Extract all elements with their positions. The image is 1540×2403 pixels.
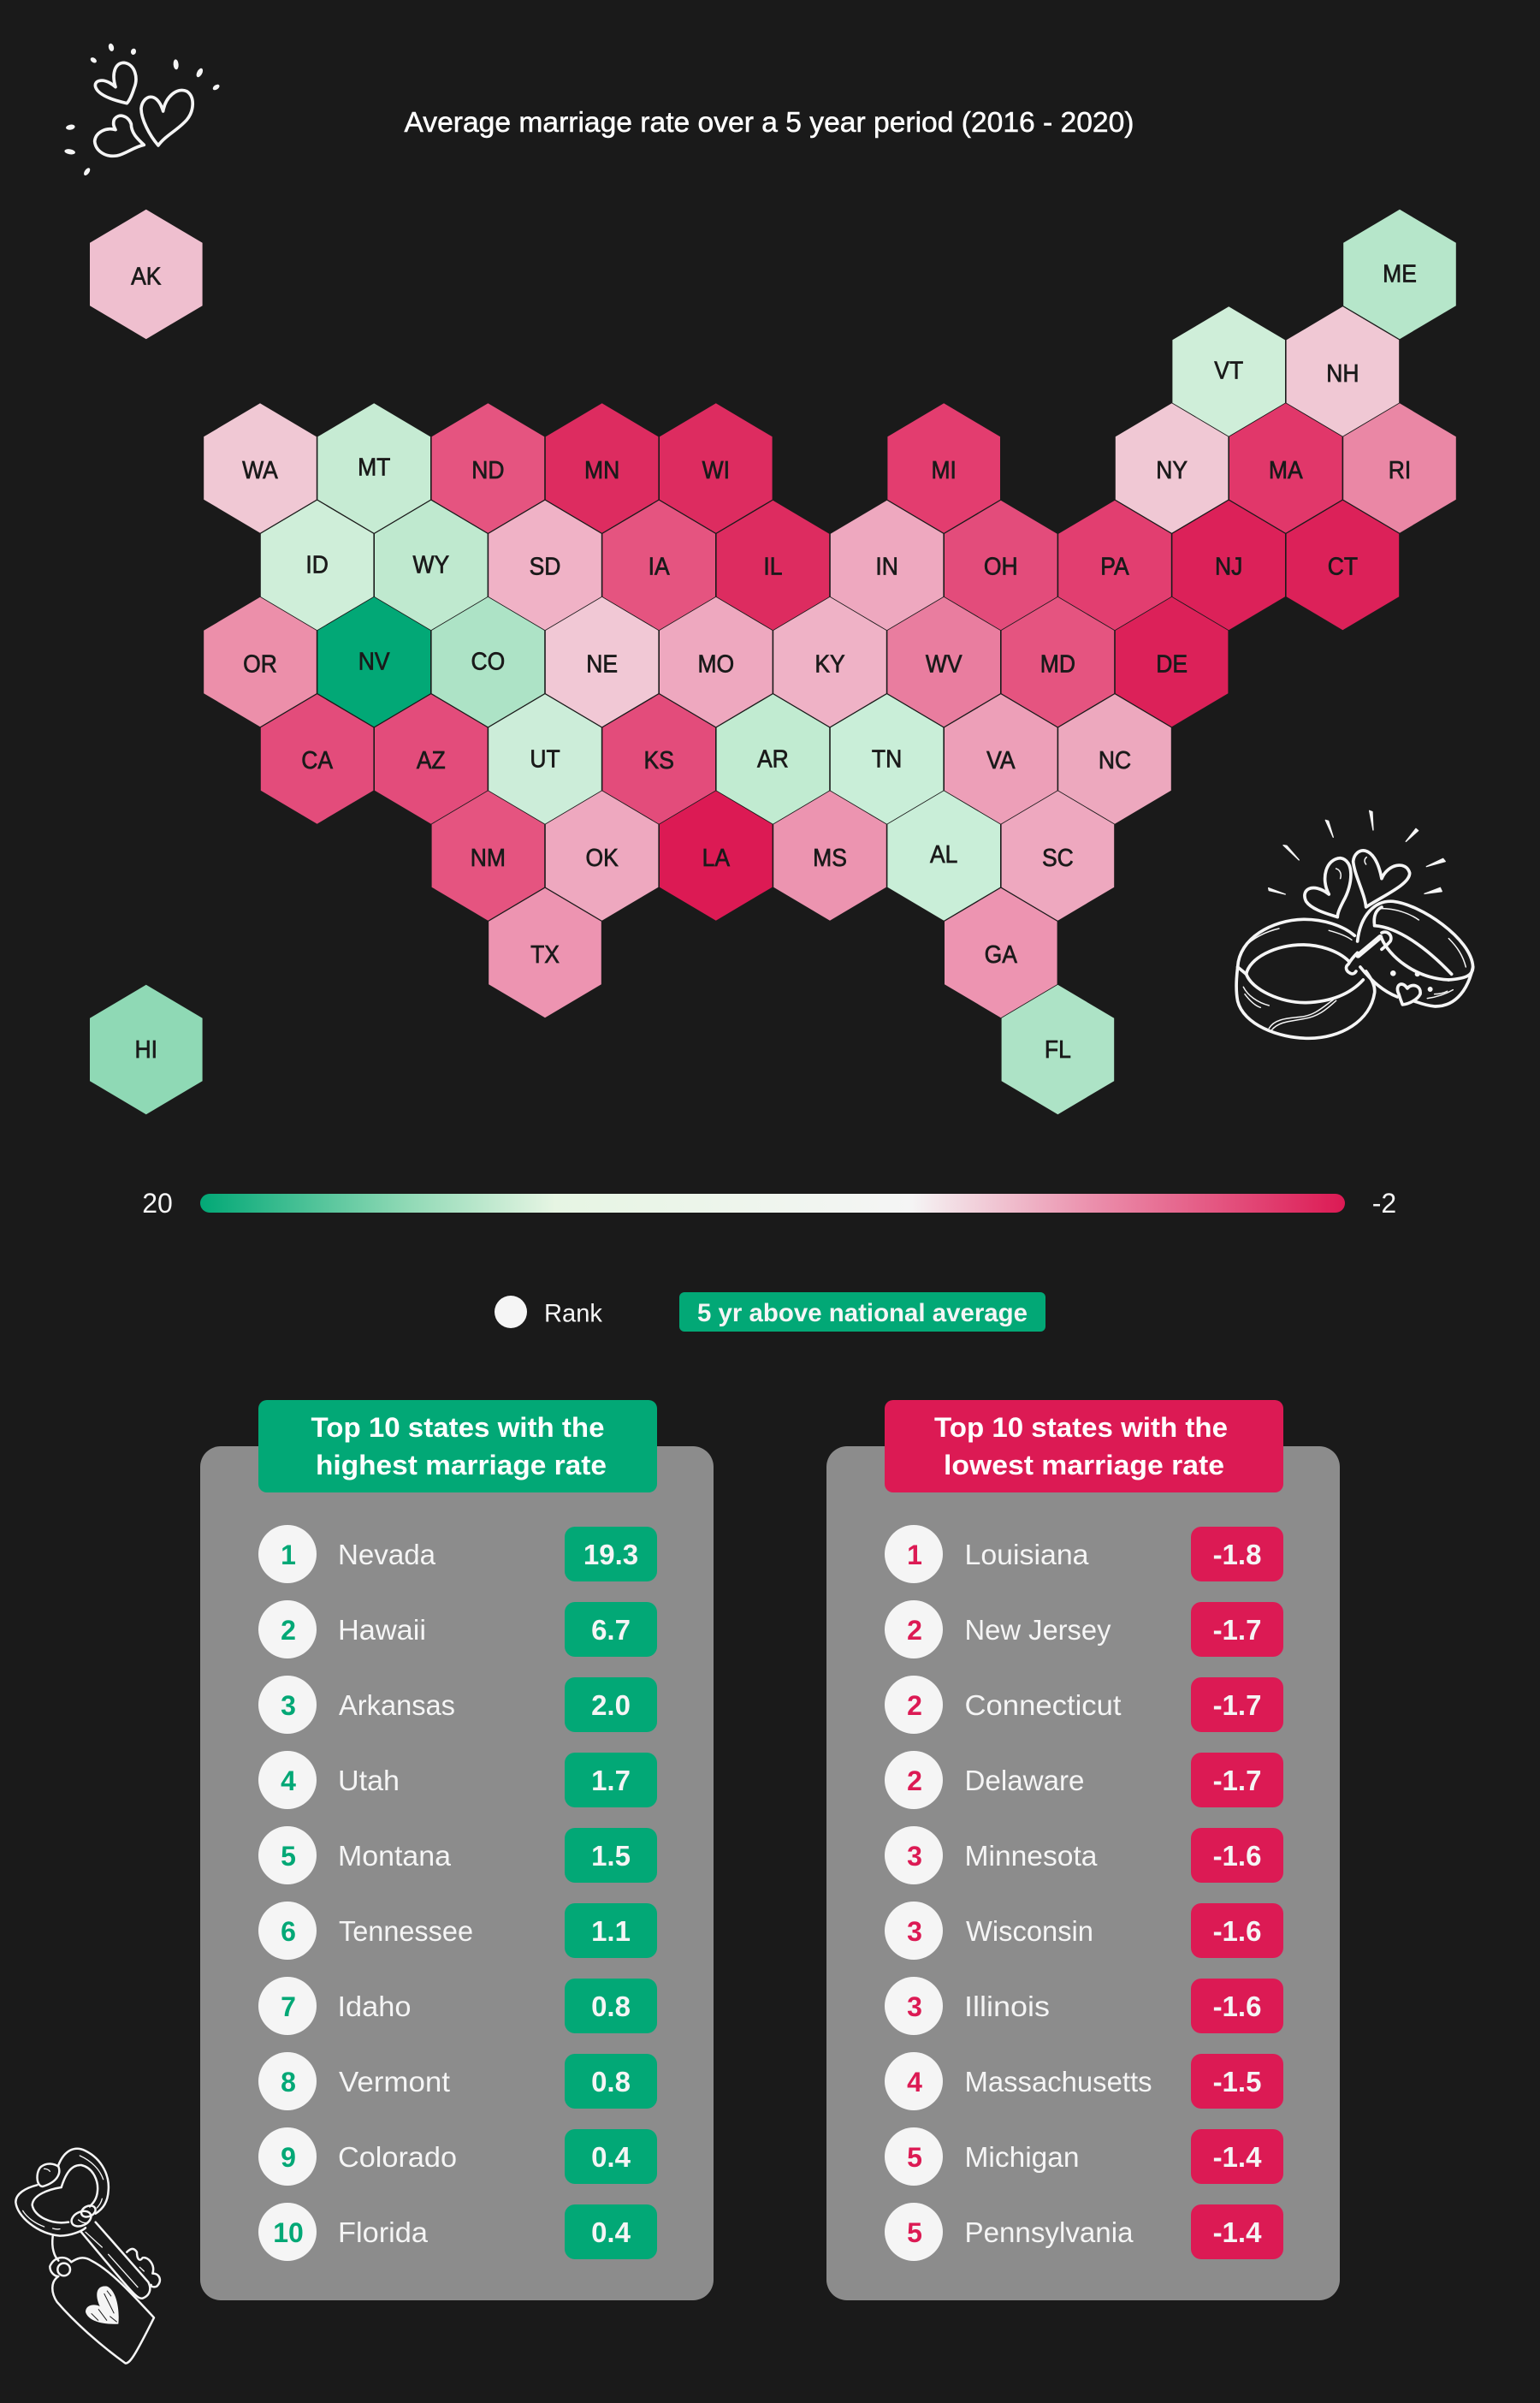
state: SC: SC	[1042, 844, 1074, 871]
row: Vermont: 8	[281, 2067, 296, 2097]
state: MS: MS	[813, 844, 847, 871]
panel heading	[885, 1400, 1283, 1492]
state: DE: DE	[1156, 650, 1188, 678]
state: PA	[1058, 501, 1171, 630]
row: Illinois: -1.6	[1213, 1991, 1261, 2022]
state: PA: PA	[1100, 553, 1129, 580]
state: OK: OK	[585, 844, 619, 871]
row: Vermont: Vermont	[339, 2066, 450, 2097]
state: AK	[90, 210, 203, 339]
row: Arkansas: 2.0	[591, 1689, 631, 1721]
row: Pennsylvania: -1.4	[1213, 2216, 1262, 2248]
panel heading: Top 10 states with the	[311, 1412, 604, 1443]
row: Wisconsin	[885, 1902, 1283, 1960]
row: Minnesota: 3	[907, 1841, 922, 1872]
state: IA	[602, 501, 715, 630]
state: MI: MI	[931, 456, 957, 484]
row: Michigan: Michigan	[965, 2141, 1080, 2173]
row: Pennsylvania: 5	[907, 2217, 922, 2248]
row: Utah: 4	[281, 1765, 296, 1796]
row: Hawaii	[258, 1600, 657, 1658]
row: Connecticut: 2	[907, 1690, 922, 1721]
state: MN	[546, 403, 658, 533]
row: Nevada	[258, 1525, 657, 1583]
state: ID: ID	[305, 551, 329, 578]
state: GA	[945, 888, 1057, 1018]
state: WI	[660, 403, 773, 533]
state: NY	[1116, 403, 1228, 533]
state: MO: MO	[697, 650, 734, 678]
state: MN: MN	[584, 456, 619, 484]
icon: key with heart tag	[15, 2149, 160, 2364]
state: TX: TX	[530, 940, 560, 968]
state: OH: OH	[984, 553, 1018, 580]
state: NC: NC	[1099, 746, 1131, 774]
state: CA	[261, 694, 373, 824]
state: UT	[489, 694, 601, 824]
row: Massachusetts	[885, 2052, 1283, 2110]
row: Vermont: 0.8	[591, 2066, 631, 2097]
row: Colorado	[258, 2127, 657, 2186]
row: Utah: Utah	[338, 1765, 400, 1796]
row: Colorado: Colorado	[338, 2141, 457, 2173]
state: FL: FL	[1045, 1035, 1071, 1063]
state: MO	[660, 597, 773, 727]
row: Louisiana: 1	[907, 1540, 922, 1570]
row: Montana: Montana	[338, 1840, 452, 1872]
row: Nevada: 1	[281, 1540, 296, 1570]
row: Tennessee: Tennessee	[339, 1915, 473, 1947]
state: MA: MA	[1269, 456, 1303, 484]
row: Idaho: 0.8	[591, 1991, 631, 2022]
state: VA	[945, 694, 1057, 824]
key: rank	[495, 1296, 603, 1328]
row: Illinois: 3	[907, 1991, 922, 2022]
row: New Jersey: 2	[907, 1615, 922, 1646]
state: KY: KY	[814, 650, 845, 678]
row: Montana: 1.5	[591, 1840, 631, 1872]
row: Idaho	[258, 1977, 657, 2035]
state: NJ	[1172, 501, 1285, 630]
state: CO	[432, 597, 544, 727]
state: LA	[660, 791, 773, 921]
state: WV	[887, 597, 1000, 727]
state: NY: NY	[1156, 456, 1188, 484]
state: KS	[602, 694, 715, 824]
row: Colorado: 0.4	[591, 2141, 631, 2173]
row: Louisiana	[885, 1525, 1283, 1583]
state: HI	[90, 985, 203, 1114]
panel heading	[258, 1400, 657, 1492]
row: Connecticut: -1.7	[1213, 1689, 1261, 1721]
row: New Jersey: -1.7	[1213, 1614, 1261, 1646]
state: IN: IN	[875, 553, 898, 580]
row: Louisiana: -1.8	[1213, 1539, 1261, 1570]
state: HI: HI	[135, 1035, 157, 1063]
row: Nevada: Nevada	[338, 1539, 436, 1570]
state: AL	[887, 791, 1000, 921]
state: NE	[546, 597, 658, 727]
state: MT	[317, 403, 430, 533]
row: Utah: 1.7	[591, 1765, 631, 1796]
row: Colorado: 9	[281, 2142, 296, 2173]
state: ND	[432, 403, 544, 533]
state: NV: NV	[358, 648, 390, 675]
row: Michigan: -1.4	[1213, 2141, 1262, 2173]
row: Tennessee: 1.1	[591, 1915, 631, 1947]
state: CT	[1287, 501, 1399, 630]
scale maximum label: 20	[142, 1188, 173, 1219]
row: Minnesota: Minnesota	[965, 1840, 1098, 1872]
row: Montana: 5	[281, 1841, 296, 1872]
state: LA: LA	[702, 844, 731, 871]
row: Wisconsin: Wisconsin	[966, 1915, 1093, 1947]
state: RI	[1343, 403, 1456, 533]
state: WA: WA	[242, 456, 278, 484]
panel background	[826, 1446, 1340, 2300]
row: Massachusetts: 4	[907, 2067, 922, 2097]
scale minimum label: -2	[1372, 1188, 1396, 1219]
state: AL: AL	[930, 840, 957, 868]
state: KY	[773, 597, 886, 727]
row: New Jersey: New Jersey	[965, 1614, 1111, 1646]
row: Tennessee	[258, 1902, 657, 1960]
row: Vermont	[258, 2052, 657, 2110]
state: FL	[1002, 985, 1114, 1114]
panel: lowest marriage rate	[826, 1400, 1340, 2300]
state: NJ: NJ	[1215, 553, 1242, 580]
state: CT: CT	[1328, 553, 1358, 580]
panel heading: Top 10 states with the	[934, 1412, 1228, 1443]
row: Massachusetts: -1.5	[1213, 2066, 1261, 2097]
state: AZ: AZ	[417, 746, 446, 774]
title: Average marriage rate over a 5 year period (2016 - 2020)	[404, 106, 1134, 138]
state: ND: ND	[471, 456, 505, 484]
row: Utah	[258, 1751, 657, 1809]
panel heading: lowest marriage rate	[944, 1450, 1224, 1480]
row: Louisiana: Louisiana	[965, 1539, 1089, 1570]
state: MS	[773, 791, 886, 921]
state: VT	[1172, 306, 1285, 436]
row: Florida: 10	[273, 2217, 304, 2248]
state: AK: AK	[131, 263, 162, 290]
row: Delaware: 2	[907, 1765, 922, 1796]
row: Pennsylvania	[885, 2203, 1283, 2261]
row: Delaware: Delaware	[965, 1765, 1085, 1796]
state: CO: CO	[471, 648, 505, 675]
state: NM: NM	[471, 844, 506, 871]
colour scale legend	[142, 1188, 1396, 1219]
state: SC	[1002, 791, 1114, 921]
row: Arkansas: 3	[281, 1690, 296, 1721]
state: TN: TN	[872, 745, 902, 773]
state: CA: CA	[301, 746, 334, 774]
state: ID	[261, 501, 373, 630]
state: OR	[204, 597, 317, 727]
hex map of US states	[90, 210, 1456, 1114]
key: rank: Rank	[544, 1299, 603, 1328]
state: KS: KS	[644, 746, 674, 774]
row: Florida: Florida	[338, 2216, 429, 2248]
row: Hawaii: 6.7	[591, 1614, 631, 1646]
state: IL: IL	[763, 553, 782, 580]
state: NM	[432, 791, 544, 921]
state: NH: NH	[1326, 359, 1359, 387]
state: AR	[717, 694, 829, 824]
state: SD: SD	[530, 553, 560, 580]
state: NE: NE	[586, 650, 618, 678]
row: Idaho: Idaho	[337, 1991, 411, 2022]
state: AZ	[375, 694, 488, 824]
row: Florida	[258, 2203, 657, 2261]
state: OR: OR	[243, 650, 277, 678]
row: Montana	[258, 1826, 657, 1884]
panel: highest marriage rate	[200, 1400, 714, 2300]
state: SD	[489, 501, 601, 630]
panel background	[200, 1446, 714, 2300]
state: OH	[945, 501, 1057, 630]
state: RI: RI	[1389, 456, 1411, 484]
row: Connecticut: Connecticut	[965, 1689, 1121, 1721]
row: Minnesota: -1.6	[1213, 1840, 1261, 1872]
row: Hawaii: 2	[281, 1615, 296, 1646]
gradient bar	[200, 1194, 1345, 1213]
row: Nevada: 19.3	[583, 1539, 638, 1570]
row: Arkansas	[258, 1676, 657, 1734]
row: New Jersey	[885, 1600, 1283, 1658]
row: Pennsylvania: Pennsylvania	[965, 2216, 1134, 2248]
row: Illinois: Illinois	[964, 1991, 1050, 2022]
row: Michigan	[885, 2127, 1283, 2186]
row: Florida: 0.4	[591, 2216, 631, 2248]
state: IA: IA	[649, 553, 670, 580]
state: IL	[717, 501, 829, 630]
state: MD: MD	[1040, 650, 1075, 678]
row: Idaho: 7	[281, 1991, 296, 2022]
state: ME	[1343, 210, 1456, 339]
state: NV	[317, 597, 430, 727]
state: TX	[489, 888, 601, 1018]
row: Delaware	[885, 1751, 1283, 1809]
icon: three hearts	[64, 43, 221, 176]
state: NH	[1287, 306, 1399, 436]
state: TN	[831, 694, 943, 824]
state: GA: GA	[985, 940, 1018, 968]
state: AR: AR	[757, 745, 789, 773]
heart on tag	[86, 2286, 119, 2324]
state: WY: WY	[412, 551, 449, 578]
key: 5 yr above national average	[679, 1292, 1045, 1332]
state: MI	[887, 403, 1000, 533]
state: MD	[1002, 597, 1114, 727]
icon: wedding rings and hearts	[1236, 810, 1473, 1038]
state: MT: MT	[358, 454, 391, 481]
row: Tennessee: 6	[281, 1916, 296, 1947]
state: IN	[831, 501, 943, 630]
row: Illinois	[885, 1977, 1283, 2035]
state: VT: VT	[1214, 357, 1243, 384]
row: Delaware: -1.7	[1213, 1765, 1261, 1796]
state: MA	[1229, 403, 1342, 533]
row: Arkansas: Arkansas	[339, 1689, 455, 1721]
row: Hawaii: Hawaii	[338, 1614, 426, 1646]
row: Wisconsin: 3	[907, 1916, 922, 1947]
state: WI: WI	[702, 456, 730, 484]
state: WY	[375, 501, 488, 630]
state: WV: WV	[926, 650, 962, 678]
state: NC	[1058, 694, 1171, 824]
row: Minnesota	[885, 1826, 1283, 1884]
row: Michigan: 5	[907, 2142, 922, 2173]
state: ME: ME	[1383, 260, 1417, 288]
state: WA	[204, 403, 317, 533]
state: DE	[1116, 597, 1228, 727]
row: Wisconsin: -1.6	[1213, 1915, 1261, 1947]
state: UT: UT	[530, 745, 560, 773]
panel heading: highest marriage rate	[316, 1450, 607, 1480]
state: VA: VA	[986, 746, 1016, 774]
row: Connecticut	[885, 1676, 1283, 1734]
key: 5 yr above national average: 5 yr above national average	[697, 1299, 1028, 1327]
state: OK	[546, 791, 658, 921]
row: Massachusetts: Massachusetts	[965, 2066, 1152, 2097]
